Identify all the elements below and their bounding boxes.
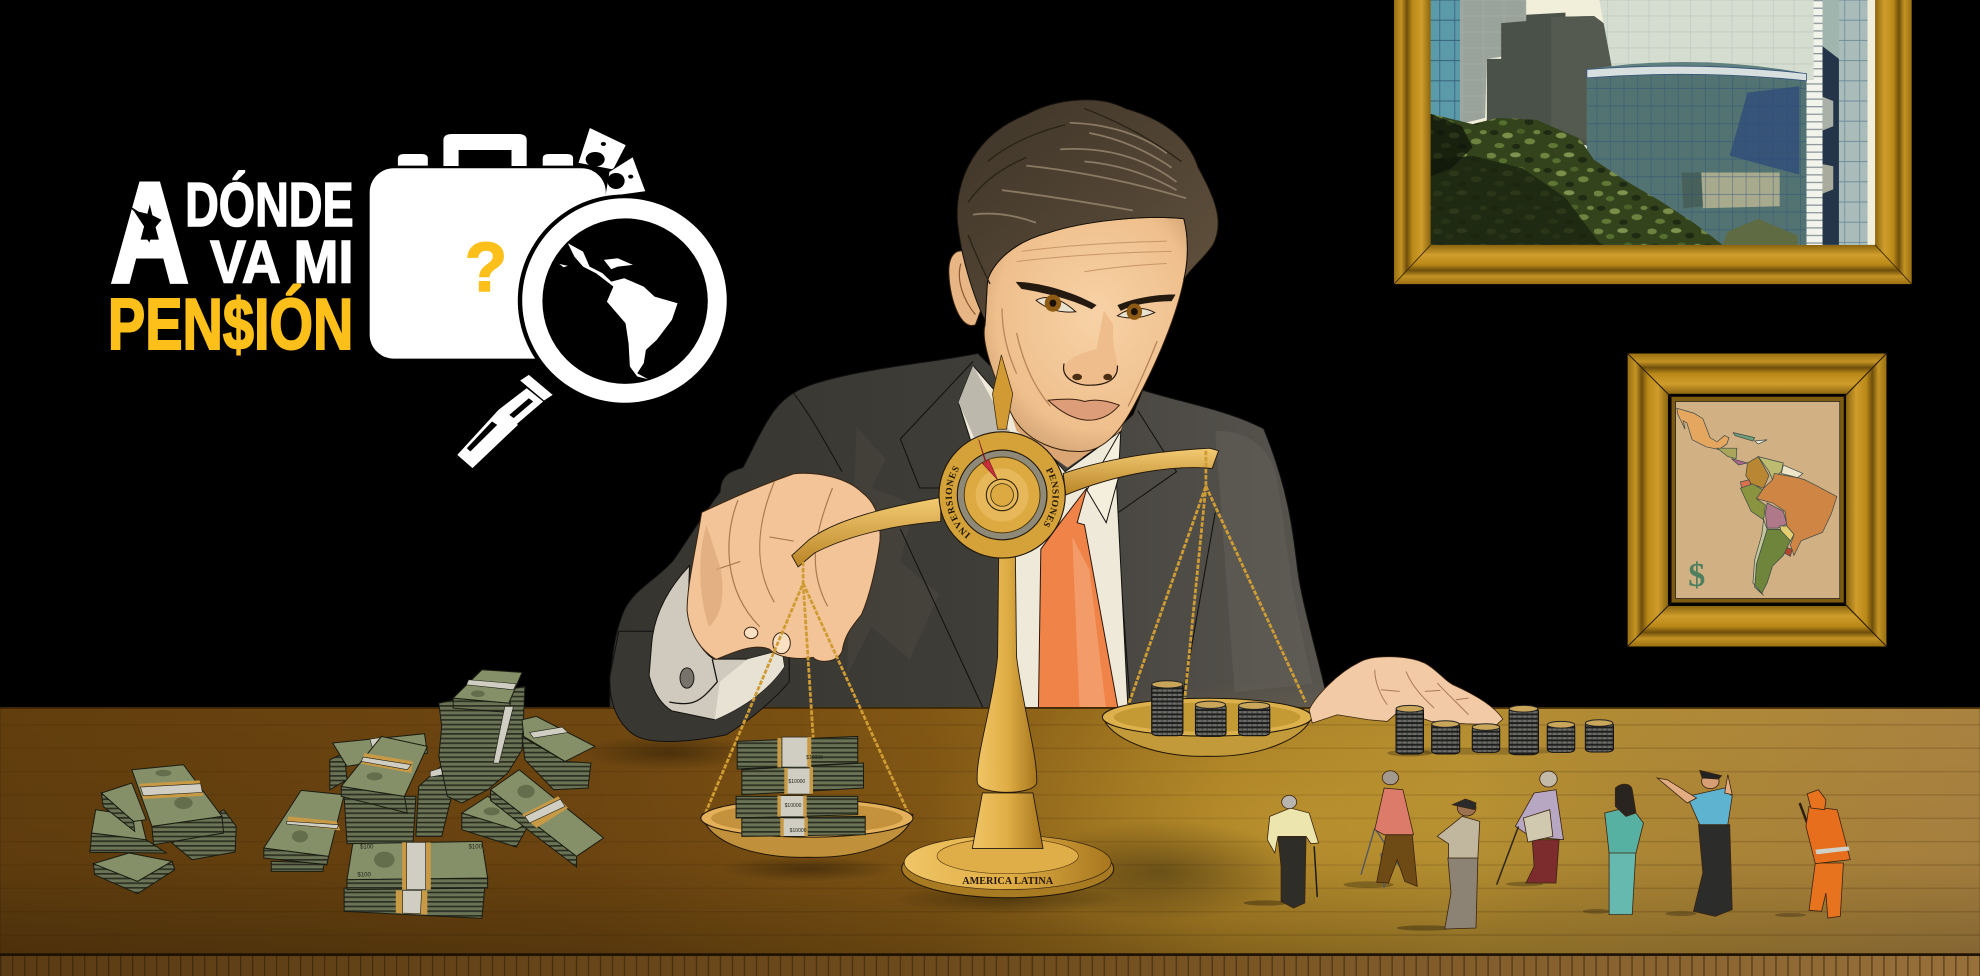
- hair: [957, 100, 1218, 321]
- brows, eyes, nose and mouth: [1002, 282, 1176, 420]
- dial label: inversiones: INVERSIONES: [946, 466, 971, 539]
- gold frame border: [1394, 0, 1912, 284]
- left sleeve over table: [581, 631, 789, 770]
- briefcase body: [370, 168, 606, 359]
- title text: [108, 152, 354, 365]
- gold frame border: [1628, 354, 1886, 646]
- street sweeper in orange: [1775, 790, 1850, 918]
- logo: ¿a dónde va mi pensión?: [108, 127, 730, 468]
- right chains: [1128, 451, 1306, 707]
- picture frame: Latin America map: [1628, 354, 1886, 646]
- man with walker: [1344, 771, 1417, 888]
- magnifying glass: [457, 194, 730, 468]
- left hand holding scale: [687, 473, 880, 661]
- bundle values: $10000: [806, 755, 823, 761]
- left chains: [702, 562, 912, 821]
- right hand on table: [1309, 657, 1503, 725]
- central dial: [938, 431, 1066, 559]
- bill denomination labels: [357, 844, 483, 878]
- coin stacks: [1152, 681, 1613, 756]
- bundle values: $10000: [790, 828, 807, 834]
- orange tie: [1038, 488, 1118, 710]
- left beam: [792, 497, 941, 567]
- shirt cuff: [649, 566, 784, 720]
- right pan: [1102, 698, 1312, 756]
- woman with bag and cane: [1497, 771, 1563, 886]
- people queue: [1244, 770, 1850, 931]
- map cut-out in letter A: [128, 205, 162, 243]
- money stacks: [90, 670, 604, 918]
- banknotes behind briefcase: [578, 127, 646, 197]
- glass handle: [457, 375, 553, 468]
- title text: VA MI: [210, 228, 353, 296]
- bundle values: $10000: [785, 803, 802, 809]
- left pan shadow: [720, 856, 897, 881]
- building scene: [1430, 0, 1876, 245]
- red needle: [979, 439, 998, 480]
- jacket: [610, 353, 1332, 717]
- map of Latin America: [1677, 408, 1837, 595]
- Latin America silhouette: [559, 243, 678, 379]
- man in suit: [610, 100, 1332, 717]
- map canvas: [1676, 402, 1840, 598]
- neck and face: [949, 217, 1187, 468]
- left pan: [701, 799, 913, 857]
- wooden table: [0, 682, 1980, 976]
- table front edge: [0, 956, 1980, 976]
- title text: A: [110, 152, 190, 313]
- banknote bundles on left pan: [736, 736, 865, 836]
- nurse: [1583, 784, 1643, 915]
- bundle values: $10000: [788, 779, 805, 785]
- picture frame: city buildings: [1394, 0, 1912, 284]
- bill denomination labels: $100: [469, 844, 483, 850]
- bill denomination labels: $100: [357, 872, 372, 878]
- old man with cane: [1244, 795, 1319, 908]
- money pile centre: [264, 670, 604, 918]
- spire: [993, 355, 1013, 429]
- man with cap: [1397, 799, 1480, 931]
- title text: DÓNDE: [185, 171, 354, 240]
- briefcase handle and latches: [398, 134, 573, 166]
- dollar sign: $: [1688, 557, 1705, 594]
- shirt and collar: [958, 366, 1128, 710]
- dial label: pensiones: PENSIONES: [1044, 467, 1059, 528]
- bill denomination labels: $100: [360, 844, 374, 850]
- column: [977, 543, 1037, 792]
- right beam: [1063, 448, 1219, 495]
- police officer: [1657, 770, 1732, 916]
- base of scale: [892, 793, 1124, 914]
- question mark: ?: [465, 228, 507, 306]
- balance scale: [700, 354, 1312, 911]
- base engraving: AMERICA LATINA: [962, 875, 1053, 887]
- money pile left: [90, 765, 236, 894]
- title text: PEN$IÓN: [108, 284, 353, 365]
- bundle values: [785, 755, 823, 834]
